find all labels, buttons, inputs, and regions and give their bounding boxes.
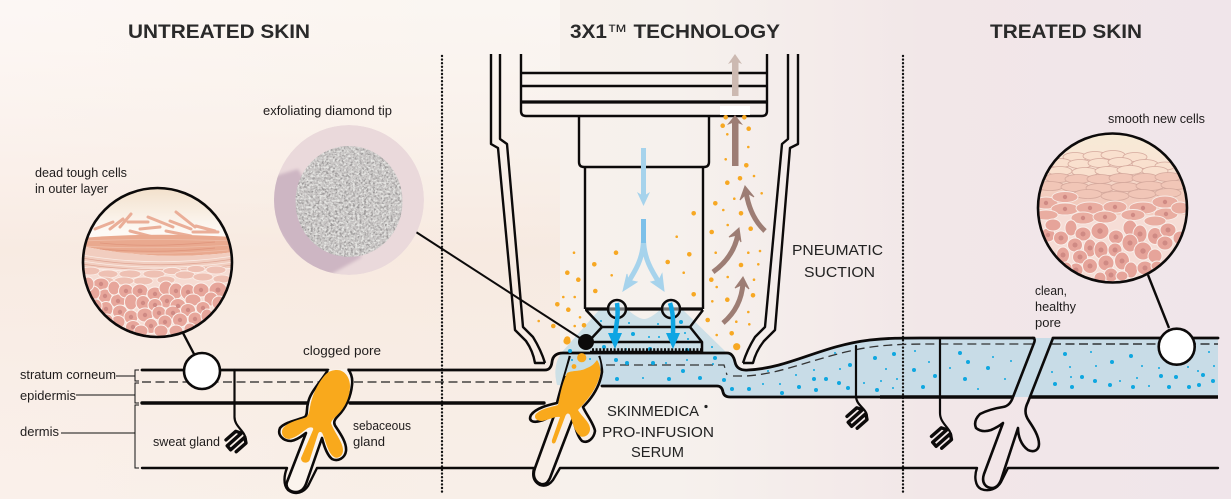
arrow: upward suction (727, 115, 743, 166)
device head (521, 54, 767, 309)
callout dot: untreated (184, 353, 220, 389)
label: dermis: dermis (20, 425, 59, 439)
skin layer lines (142, 338, 1218, 493)
label: clean healthy pore (1035, 284, 1077, 330)
label: dead tough cells: dead tough cells (35, 166, 127, 180)
diamond tip photo (268, 125, 424, 277)
label: SkinMedica serum: SKINMEDICA (607, 403, 699, 420)
arrow: curved suction top (740, 186, 765, 231)
label: clean healthy pore: healthy (1035, 300, 1077, 314)
sweat gland: treated (932, 338, 952, 448)
magnifier: untreated skin (80, 185, 236, 342)
blue serum dots (568, 320, 1215, 395)
magnifier: treated skin (1034, 130, 1191, 287)
exfoliating tip (586, 300, 703, 352)
label: clean healthy pore: clean, (1035, 284, 1067, 298)
clogged pore gland: centre (530, 353, 602, 484)
connector: treated magnifier (1148, 275, 1169, 328)
round cells (1041, 219, 1187, 284)
label: stratum corneum: stratum corneum (20, 368, 116, 382)
arrow: curved suction lower (723, 277, 749, 323)
device outer walls (491, 54, 798, 363)
flat cells (80, 266, 231, 285)
orange debris particles (537, 115, 763, 350)
connector: untreated magnifier (183, 333, 194, 354)
sweat gland: centre (847, 346, 867, 428)
label: sebaceous gland: sebaceous (353, 419, 411, 433)
clean pore gland: treated (975, 338, 1053, 488)
heading: treated skin: TREATED SKIN (990, 21, 1142, 43)
label: dead tough cells (35, 166, 127, 196)
arrow: serum blue left (608, 303, 622, 349)
clogged pore gland: untreated (279, 369, 352, 492)
label: sebaceous gland: gland (353, 435, 385, 449)
label: clean healthy pore: pore (1035, 316, 1061, 330)
arrow: serum blue right (666, 303, 680, 349)
label: SkinMedica serum: PRO-INFUSION (602, 424, 714, 441)
arrow: faded upward suction (728, 54, 742, 96)
arrow: curved suction middle (713, 228, 741, 272)
heading: untreated skin: UNTREATED SKIN (128, 21, 310, 43)
label: sweat gland: sweat gland (153, 435, 220, 449)
label: epidermis: epidermis (20, 389, 76, 403)
divider: left (441, 56, 443, 495)
label: SkinMedica serum: SERUM (631, 444, 684, 461)
round cells (82, 277, 227, 340)
scale cells (1048, 150, 1175, 176)
label: SkinMedica serum (602, 403, 714, 461)
serum layer (555, 309, 1218, 397)
flat nucleated cells (1034, 192, 1189, 226)
arrow: light blue split (623, 220, 664, 291)
device handpiece (491, 54, 798, 363)
pointer dot (578, 334, 594, 350)
label: clogged pore: clogged pore (303, 344, 381, 358)
divider: right (902, 56, 904, 495)
arrow: light blue down (637, 148, 650, 206)
label: smooth new cells: smooth new cells (1108, 112, 1205, 126)
label: pneumatic suction (792, 242, 883, 281)
callout dot: treated (1159, 329, 1195, 365)
sweat gland: untreated (226, 370, 246, 452)
label: dead tough cells: in outer layer (35, 182, 108, 196)
heading: 3X1 technology: 3X1™ TECHNOLOGY (570, 21, 780, 43)
label: sebaceous gland (353, 419, 411, 449)
label: pneumatic suction: PNEUMATIC (792, 242, 883, 259)
label: pneumatic suction: SUCTION (804, 264, 875, 281)
layer brackets (61, 370, 139, 468)
pointer line: diamond tip (416, 232, 586, 342)
dead flakes (95, 212, 218, 237)
label: diamond tip: exfoliating diamond tip (263, 104, 392, 118)
